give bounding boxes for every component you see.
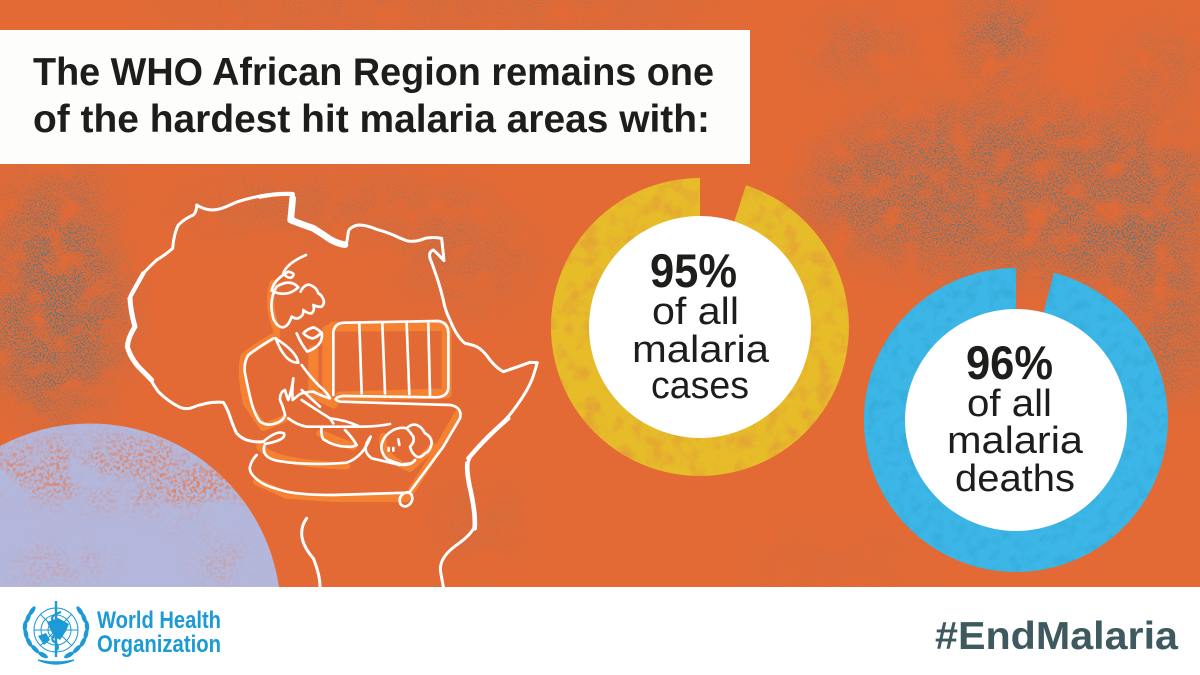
continent outline [127,194,537,587]
95% label: 95% [650,244,737,297]
95% label [632,244,770,407]
95% label: cases [651,365,749,407]
96% label: malaria [947,420,1084,462]
globe [34,608,78,652]
title text: The WHO African Region remains one [33,51,714,94]
ring: 96% of all malaria deaths [864,268,1168,572]
WHO emblem [22,601,90,664]
wreath left [22,605,49,660]
95% label: of all [652,291,739,333]
96% label: 96% [966,336,1053,389]
96% label [947,336,1084,500]
WHO wordmark: World Health [97,607,221,634]
Africa line illustration [127,194,537,587]
title box [0,30,750,164]
WHO wordmark: Organization [97,631,221,658]
orange glow behind figure [242,283,458,498]
hashtag: #EndMalaria [935,615,1178,658]
staff and serpent [52,601,61,657]
ring: 95% of all malaria cases [551,178,849,476]
heavier outline sections [291,198,345,245]
continents [38,618,69,645]
title text: of the hardest hit malaria areas with: [33,98,710,141]
crib [250,321,460,509]
96% label: of all [967,383,1052,425]
laurel base [38,660,74,664]
blanket loop [263,433,410,465]
lilac semicircle [0,423,279,587]
WHO wordmark [97,607,221,658]
baby [381,425,432,465]
wreath right [63,605,90,660]
95% label: malaria [632,329,770,371]
96% label: deaths [955,458,1075,500]
footer bar [0,587,1200,675]
mother figure [245,255,390,447]
title text [33,51,714,141]
